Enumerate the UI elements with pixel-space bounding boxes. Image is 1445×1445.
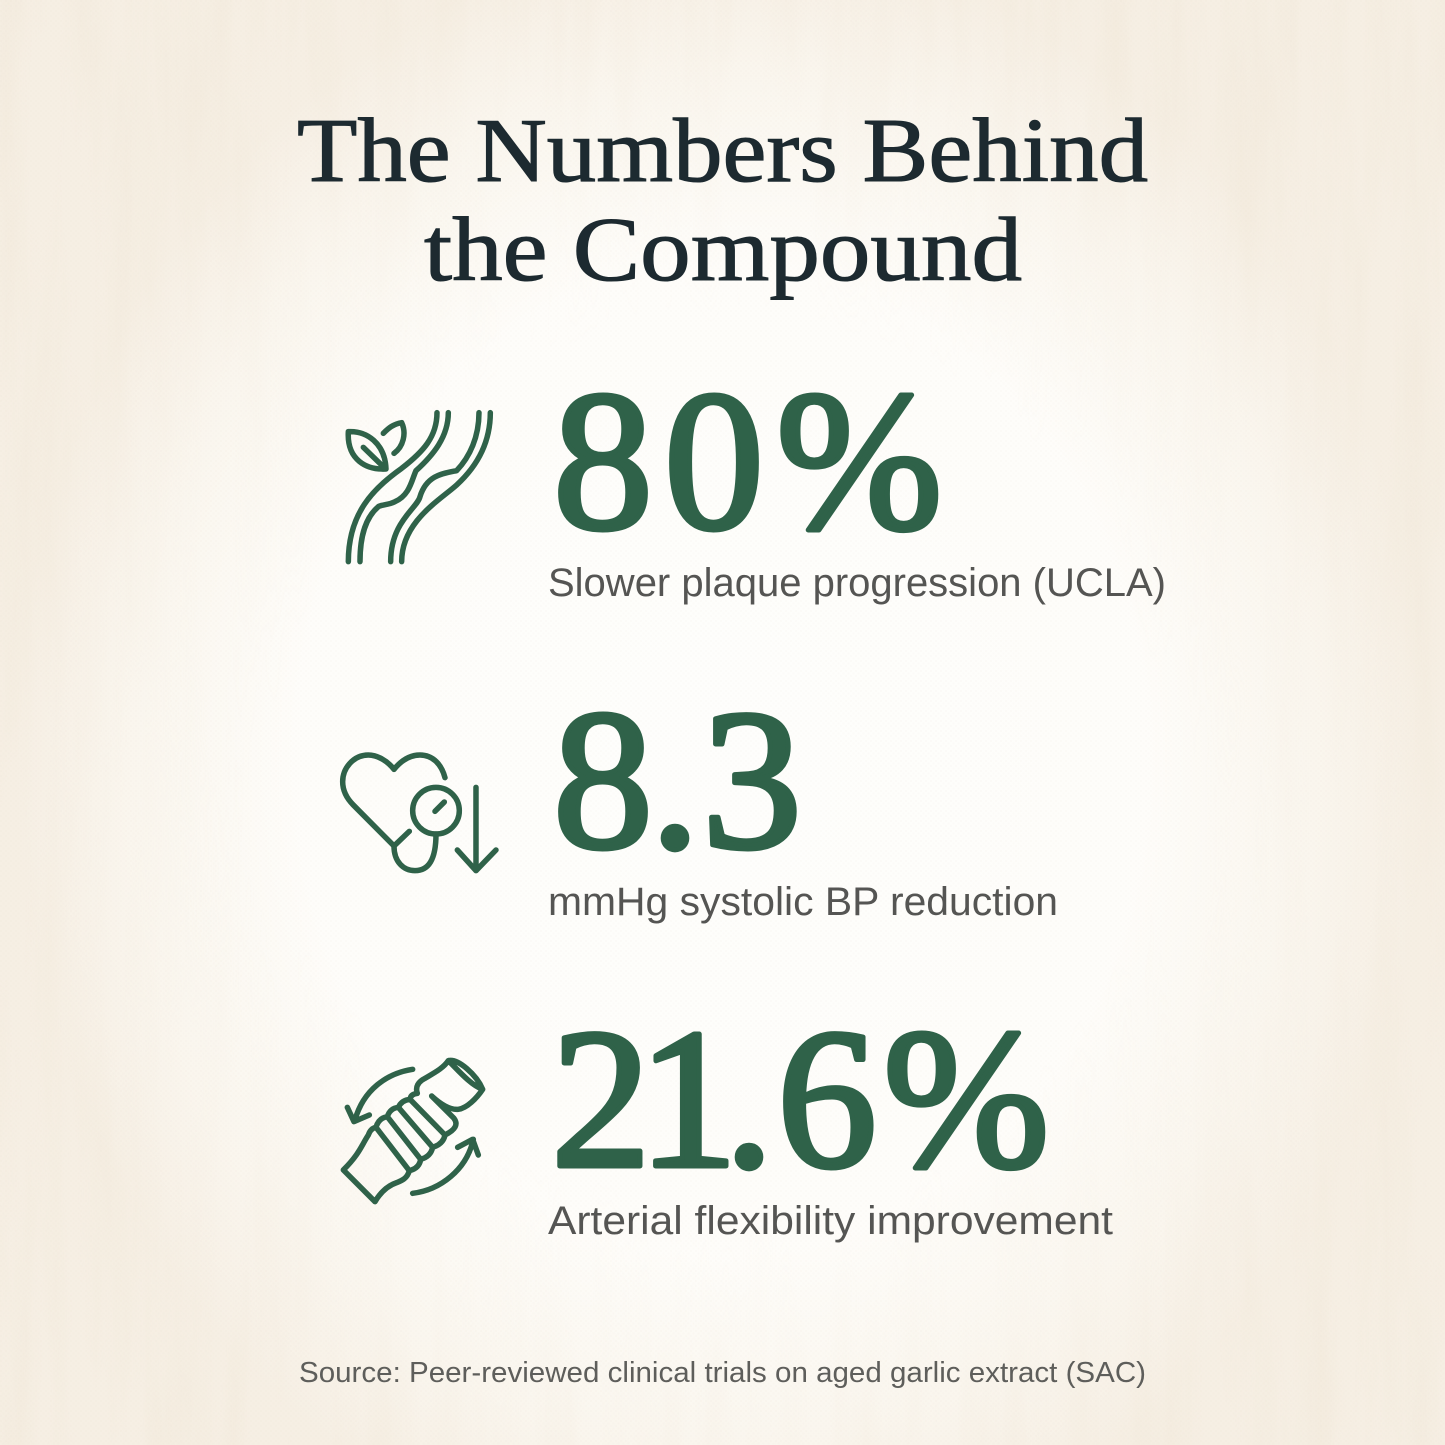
label: arterial flexibility: Arterial flexibility improvement (548, 1199, 1113, 1243)
number: 80%: 80% (553, 351, 943, 572)
label: blood pressure: mmHg systolic BP reduction (548, 880, 1058, 924)
icon: heart with gauge and down arrow (343, 755, 496, 871)
stat row: arterial flexibility (343, 989, 1113, 1243)
label: plaque: Slower plaque progression (UCLA) (548, 561, 1166, 605)
stat row: plaque progression (348, 351, 1166, 605)
icon: artery with leaf (348, 413, 490, 562)
title: The Numbers Behind (297, 100, 1148, 201)
number: 8.3: 8.3 (553, 670, 802, 891)
number: 21.6%: 21.6% (551, 989, 1050, 1210)
stat row: blood pressure (343, 670, 1058, 924)
title (297, 100, 1148, 300)
source note: Source: Peer-reviewed clinical trials on aged garlic extract (SAC) (299, 1357, 1146, 1389)
icon: flexible artery with rotation arrows (343, 1060, 483, 1202)
title: the Compound (424, 199, 1022, 300)
